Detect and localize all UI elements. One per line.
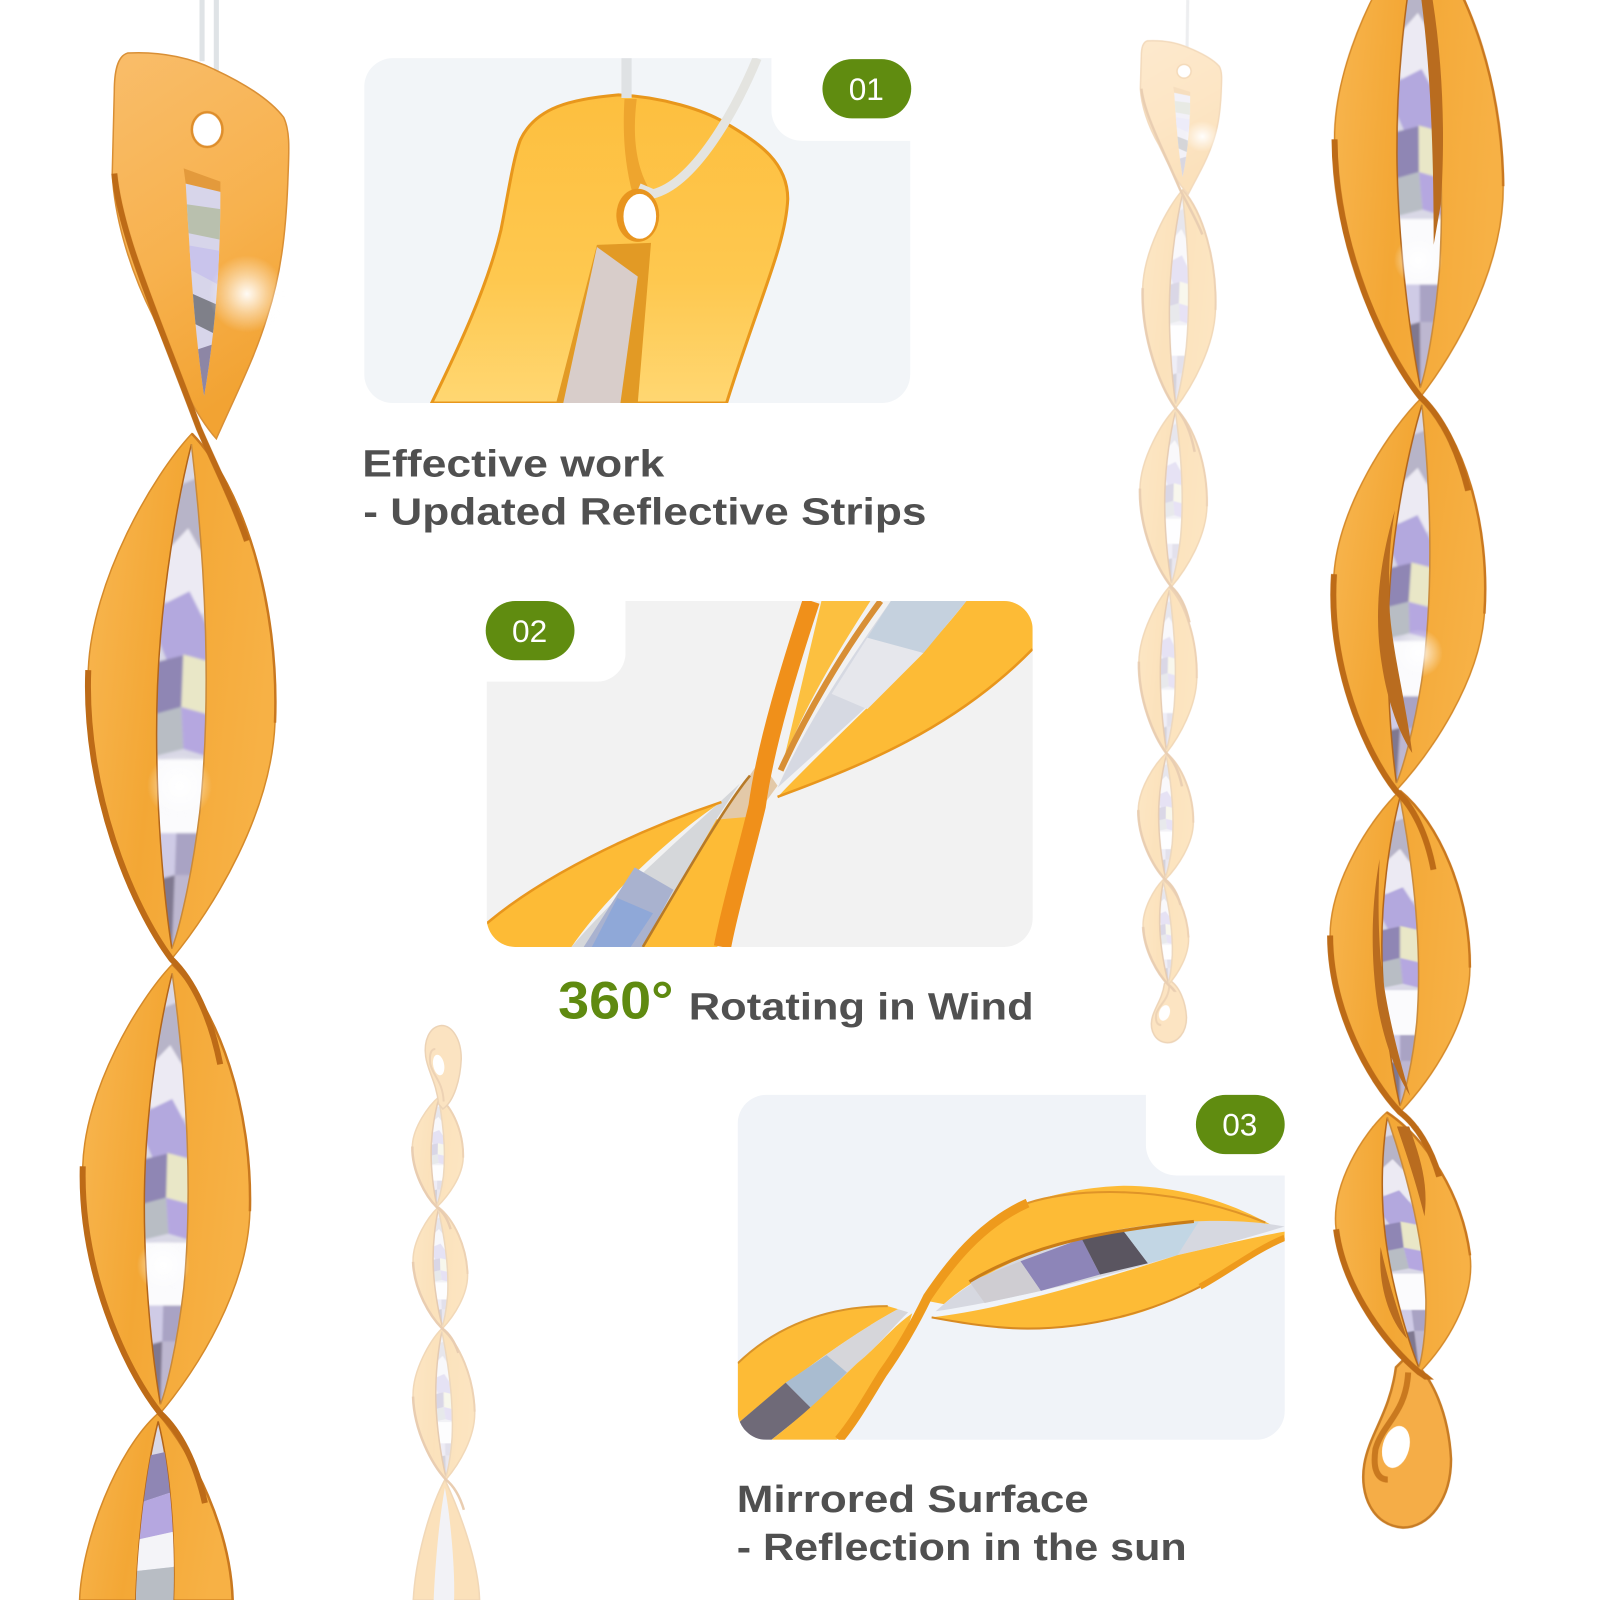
large spiral: right (1314, 0, 1505, 1528)
badge 02 (486, 601, 574, 660)
light reflections (1394, 236, 1443, 678)
caption 01 (362, 443, 927, 532)
bottom lobe (80, 1413, 233, 1600)
orange strands (722, 601, 811, 947)
badge 03: 03 (1222, 1107, 1257, 1143)
faded spiral: lower middle (411, 1025, 480, 1600)
caption 02: 360° (558, 971, 673, 1030)
white corner notch (480, 592, 626, 682)
upper right blade (778, 601, 1033, 797)
panel 02: rotating twist closeup (480, 592, 1033, 947)
badge 01: 01 (849, 71, 884, 107)
bottom lobe (413, 1480, 480, 1600)
upper mirror strip (778, 601, 966, 788)
left upper blade (738, 1306, 898, 1423)
hanging thread (1187, 0, 1188, 65)
caption 02: Rotating in Wind (689, 985, 1034, 1027)
left mirror strip (738, 1309, 908, 1440)
hanging threads (202, 0, 216, 112)
panel 03: mirrored surface closeup (738, 1087, 1294, 1440)
faded spiral: top right (1137, 0, 1222, 1043)
white corner notch (771, 51, 918, 141)
left lower blade (771, 1313, 912, 1440)
upper blade (928, 1186, 1270, 1304)
caption 01: - Updated Reflective Strips (363, 490, 927, 532)
lower blade (932, 1232, 1285, 1329)
large spiral: left (73, 0, 289, 1600)
lower left blade (487, 802, 721, 947)
badge 03 (1196, 1095, 1285, 1154)
tab image (432, 95, 788, 403)
caption 03: Mirrored Surface (737, 1478, 1089, 1520)
center blend (720, 768, 778, 820)
light reflections (137, 753, 212, 1292)
caption 03 (737, 1478, 1187, 1568)
blade between strands (784, 601, 870, 760)
badge 01 (822, 59, 911, 118)
caption 01: Effective work (362, 443, 665, 485)
orange strands (839, 1203, 1028, 1440)
caption 03: - Reflection in the sun (737, 1526, 1187, 1568)
badge 02: 02 (512, 613, 547, 649)
panel 01: reflective strip closeup (364, 51, 918, 403)
brown inner bands (1373, 0, 1443, 1339)
lower mirror strip (571, 784, 740, 947)
mirror strip (936, 1221, 1285, 1311)
caption 02 (558, 971, 1034, 1030)
lower blade right of strip (643, 816, 750, 947)
white corner notch (1146, 1087, 1294, 1176)
